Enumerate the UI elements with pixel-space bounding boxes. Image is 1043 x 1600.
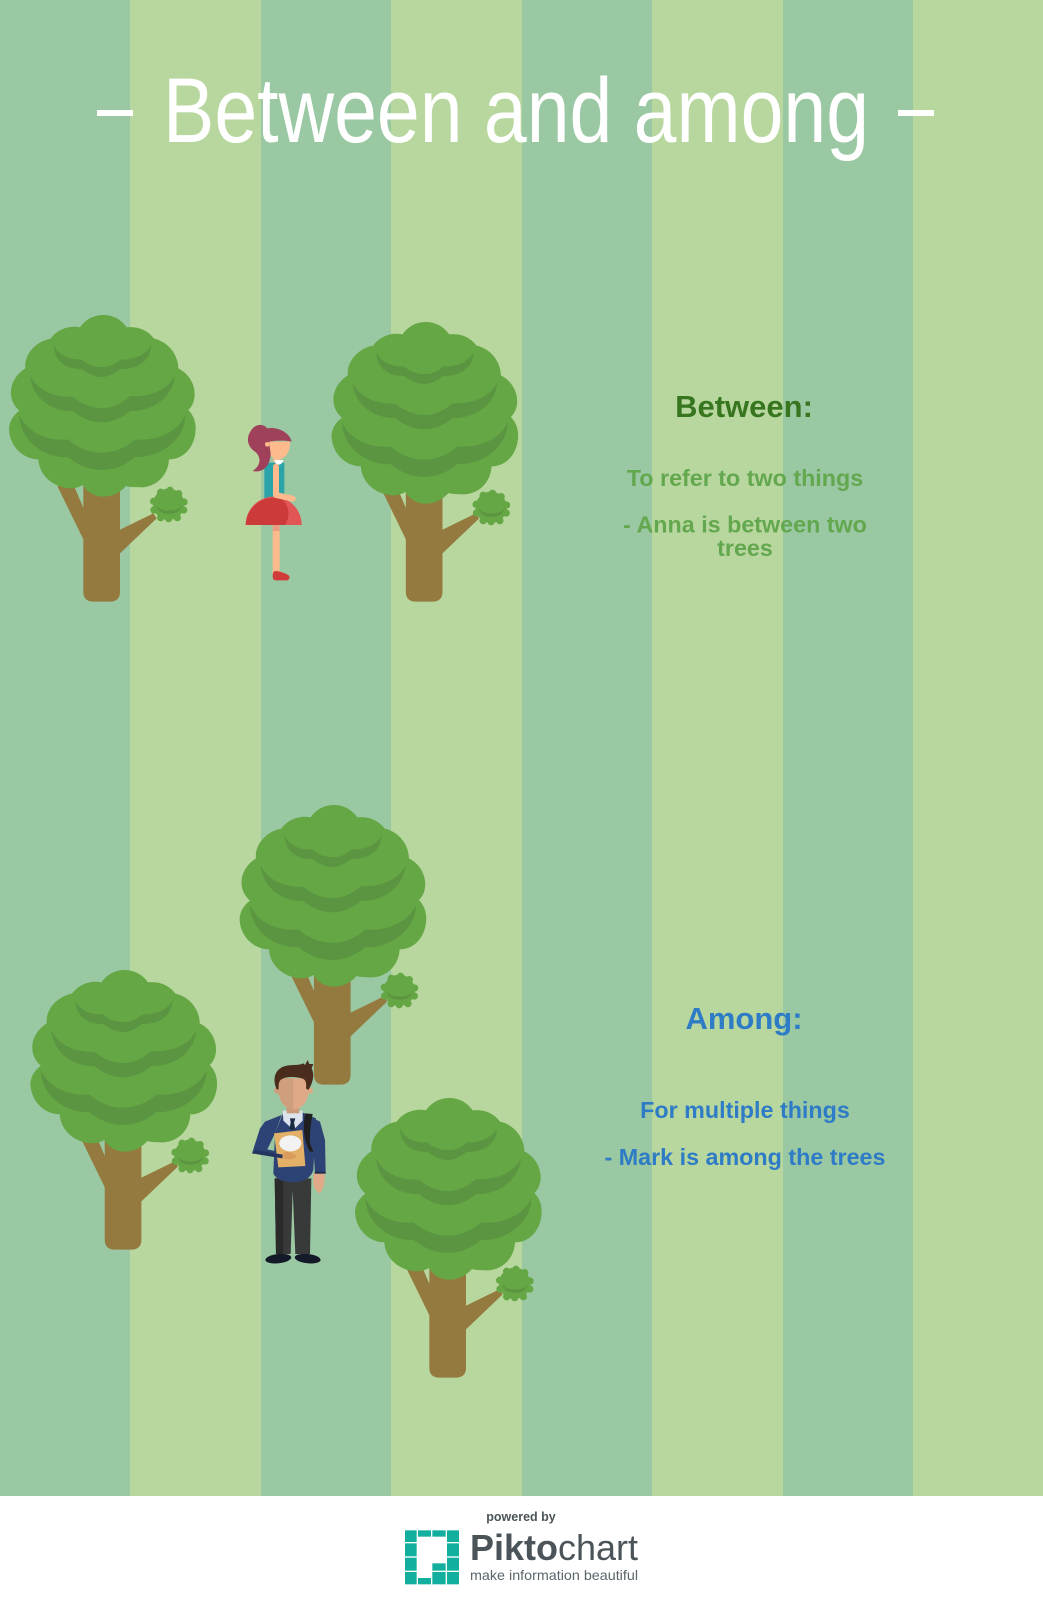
tree: among left [30,970,217,1250]
footer: powered by Piktochart [0,1496,1043,1600]
powered by text: powered by [486,1510,556,1524]
example: between: trees [717,535,773,561]
title: – [97,56,134,156]
example: between: - Anna is between two [623,512,867,538]
icon: Piktochart logo [405,1530,459,1584]
illustration: Anna, girl between trees [246,425,302,580]
title: – [898,56,935,156]
wordmark: Piktochart: Piktochart [470,1527,638,1568]
text block: among [605,1001,885,1170]
heading: between: Between: [675,389,813,424]
definition: between: To refer to two things [627,465,863,491]
tree: among top [240,805,426,1085]
heading: among: Among: [685,1001,803,1036]
tree: among right [355,1098,542,1378]
text block: between [623,389,867,561]
example: among: - Mark is among the trees [605,1144,885,1170]
definition: among: For multiple things [640,1097,850,1123]
illustration: Mark, boy among trees [252,1060,326,1265]
tree: between left [9,315,196,602]
title: Between and among [163,60,869,162]
tagline: make information beautiful [470,1567,638,1583]
tree: between right [331,322,518,602]
